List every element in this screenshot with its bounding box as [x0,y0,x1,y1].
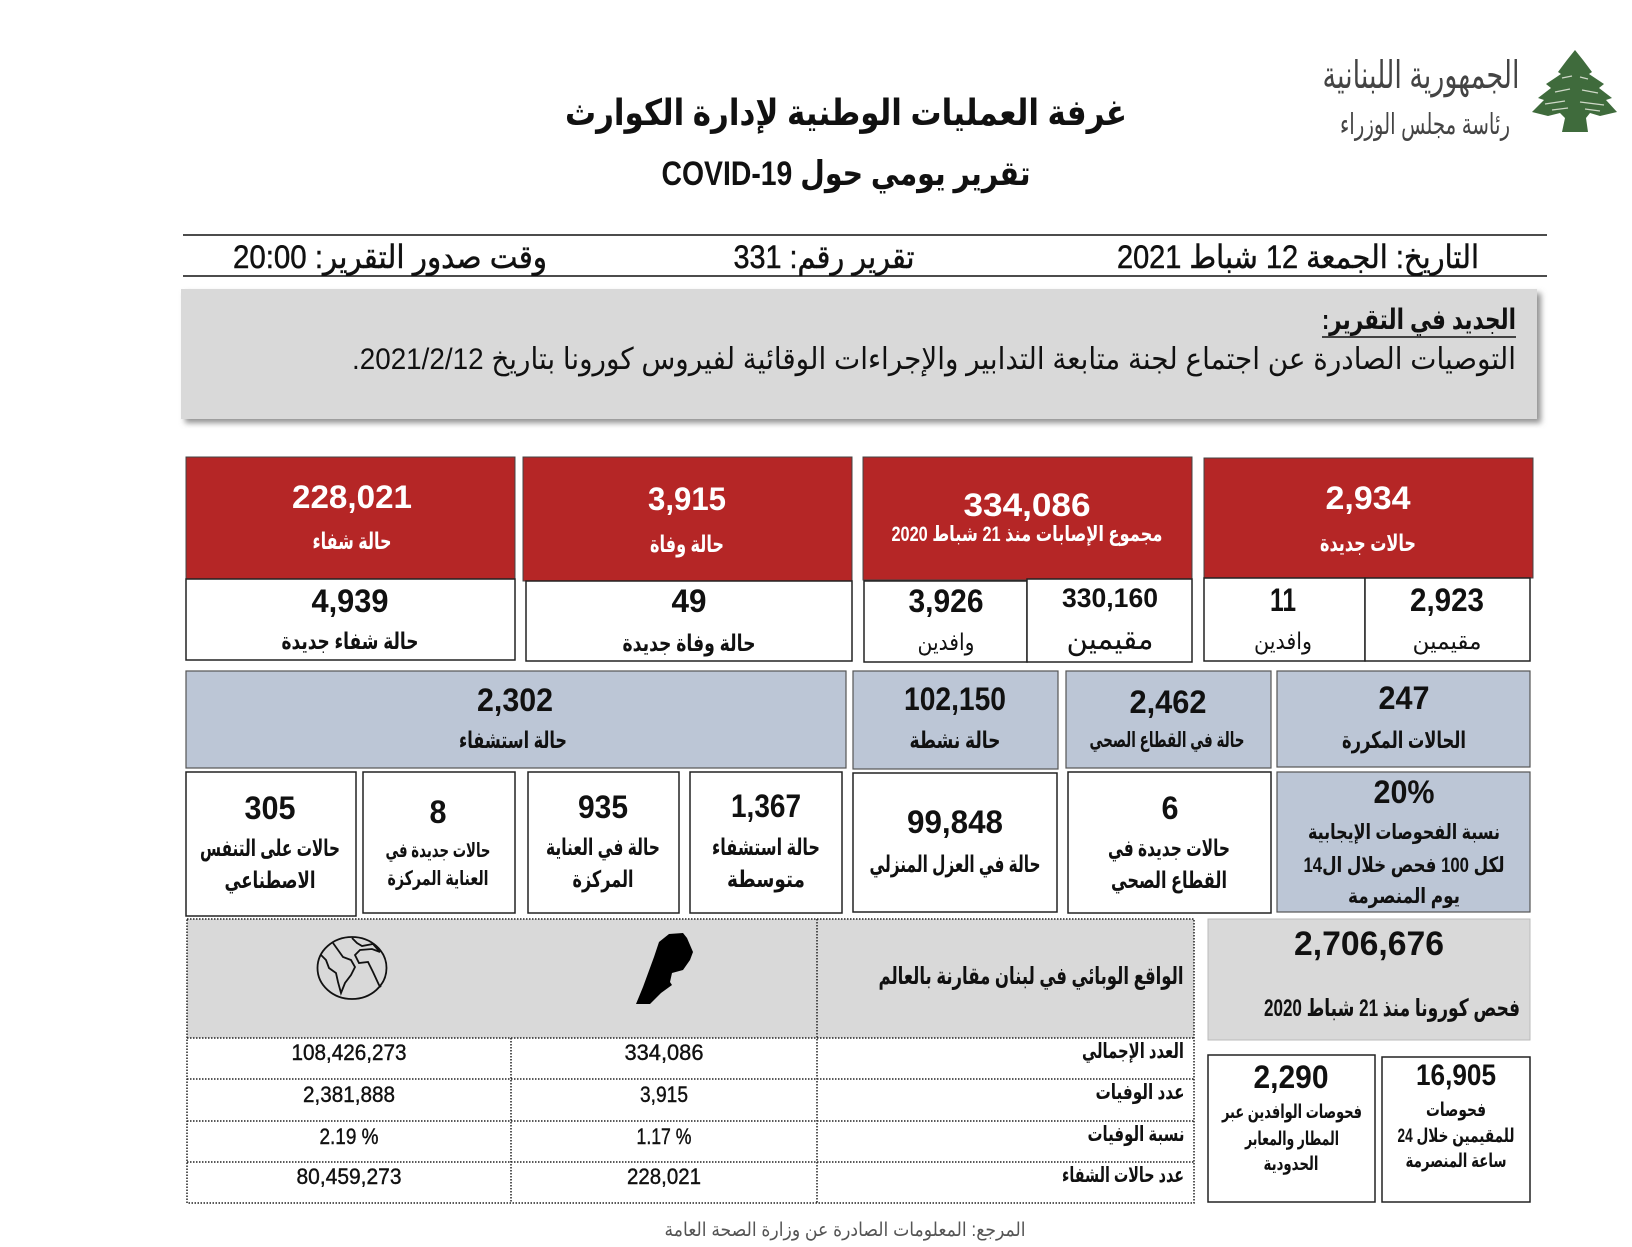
label line 2: القطاع الصحي [1111,867,1227,894]
label line 2: المطار والمعابر [1244,1129,1339,1150]
number: 2,923 [1410,582,1484,618]
label line 1: فحوصات الوافدين عبر [1221,1102,1362,1123]
label line 2: لكل 100 فحص خلال ال14 [1304,854,1504,877]
label: حالة استشفاء [459,727,567,753]
card: repeated cases [1277,671,1530,767]
label line 1: حالات جديدة في [386,840,490,863]
value: world total: 108,426,273 [292,1040,406,1065]
text: recommendations: التوصيات الصادرة عن اجتماع لجنة متابعة التدابير والإجراءات الوقائية لفيروس كورونا بتاريخ 2021/2/12. [352,343,1516,377]
label: حالة وفاة جديدة [622,630,756,657]
row label: total: العدد الإجمالي [1082,1040,1184,1063]
label line 2: للمقيمين خلال 24 [1398,1126,1514,1147]
value: Lebanon total: 334,086 [624,1040,704,1065]
label: مقيمين [1412,628,1482,655]
number: 3,915 [648,481,726,517]
label: الحالات المكررة [1342,727,1466,754]
value: world death rate: 2.19 % [320,1124,378,1149]
panel: new in report [181,289,1537,419]
subtitle: تقرير يومي حول COVID-19 [662,155,1030,194]
report time: وقت صدور التقرير: 20:00 [233,239,547,276]
label line 2: متوسطة [727,866,805,893]
label line 3: الحدودية [1264,1154,1318,1175]
table heading: الواقع الوبائي في لبنان مقارنة بالعالم [878,963,1184,990]
card: total tests [1208,919,1530,1040]
label line 2: المركزة [572,866,634,893]
number: 49 [672,583,706,619]
value: world recoveries: 80,459,273 [296,1164,402,1189]
number: 330,160 [1062,583,1158,613]
label line 2: العناية المركزة [388,868,488,890]
label: مجموع الإصابات منذ 21 شباط 2020 [892,523,1162,546]
label line 1: حالة في العناية [546,834,660,861]
number: 247 [1378,680,1430,716]
card: new recoveries [186,579,515,660]
number: 99,848 [907,804,1003,840]
card: home isolation [853,773,1057,912]
number: 20% [1374,774,1434,810]
label line 1: حالة استشفاء [712,834,820,860]
value: Lebanon death rate: 1.17 % [636,1124,692,1149]
report meta row [183,235,1547,276]
card: hospitalised [186,671,846,768]
logo: Lebanese republic cedar and calligraphy [1322,50,1617,141]
icon: cedar tree [1532,50,1617,132]
report number: تقرير رقم: 331 [734,239,914,276]
report date: التاريخ: الجمعة 12 شباط 2021 [1117,239,1479,276]
title: غرفة العمليات الوطنية لإدارة الكوارث [565,92,1127,134]
logo text: republic name: الجمهورية اللبنانية [1322,55,1520,98]
table: Lebanon vs world [187,919,1194,1203]
label: حالة في العزل المنزلي [870,851,1040,878]
card: ICU [528,772,679,913]
label: حالات جديدة [1320,530,1416,556]
number: 8 [430,794,446,830]
card: new ICU [363,772,515,913]
label line 3: ساعة المنصرمة [1406,1151,1506,1172]
number: 102,150 [904,681,1006,717]
number: 2,934 [1326,480,1411,516]
card: new health sector [1068,772,1271,913]
label: حالة في القطاع الصحي [1090,729,1244,752]
number: 2,462 [1130,684,1206,720]
card: residents tests [1382,1057,1530,1202]
card: ventilated [186,772,356,916]
card: total residents [1027,579,1192,662]
heading: new in report: الجديد في التقرير: [1322,304,1516,336]
row label: recoveries: عدد حالات الشفاء [1062,1164,1184,1187]
label line 1: فحوصات [1426,1100,1486,1121]
label line 1: حالات جديدة في [1108,835,1230,862]
source note: المرجع: المعلومات الصادرة عن وزارة الصحة العامة [664,1220,1026,1241]
card: new residents [1365,578,1530,661]
label line 2: الاصطناعي [224,867,316,894]
card: deaths total [523,457,852,581]
card: positivity rate [1277,772,1530,912]
row label: death rate: نسبة الوفيات [1088,1123,1184,1146]
number: 1,367 [731,788,801,824]
logo text: presidency of council of ministers: رئاسة مجلس الوزراء [1340,109,1510,141]
card: new arrivals [1204,578,1365,661]
number: 935 [578,789,628,825]
value: Lebanon deaths: 3,915 [640,1082,688,1107]
icon: Lebanon map [636,933,693,1004]
number: 2,302 [477,682,553,718]
number: 228,021 [292,479,412,515]
label: حالة شفاء [312,528,392,554]
card: total cases [863,457,1192,580]
card: total arrivals [864,581,1027,662]
card: new cases [1204,458,1533,578]
row label: deaths: عدد الوفيات [1096,1081,1184,1104]
label: وافدين [918,629,974,656]
number: 11 [1270,582,1296,618]
label: حالة وفاة [650,531,724,558]
number: 6 [1162,790,1178,826]
label: مقيمين [1066,623,1154,656]
icon: globe [318,937,386,999]
card: moderate [690,772,842,913]
label line 1: حالات على التنفس [200,835,340,861]
card: new deaths [526,581,852,661]
number: 305 [244,790,296,826]
label line 3: يوم المنصرمة [1348,885,1460,908]
label line 1: نسبة الفحوصات الإيجابية [1308,821,1500,844]
card: recovered total [186,457,515,579]
value: Lebanon recoveries: 228,021 [627,1164,701,1189]
label: فحص كورونا منذ 21 شباط 2020 [1264,995,1520,1022]
number: 3,926 [908,583,984,619]
number: 334,086 [964,487,1090,523]
card: health sector cases [1066,671,1271,768]
label: حالة شفاء جديدة [282,628,418,654]
number: 2,706,676 [1294,925,1444,963]
number: 2,290 [1254,1059,1328,1095]
number: 16,905 [1416,1059,1496,1092]
card: arrivals tests [1208,1055,1375,1202]
label: وافدين [1254,628,1312,655]
number: 4,939 [312,583,388,619]
card: active cases [853,671,1058,769]
value: world deaths: 2,381,888 [303,1082,395,1107]
label: حالة نشطة [910,727,1000,753]
